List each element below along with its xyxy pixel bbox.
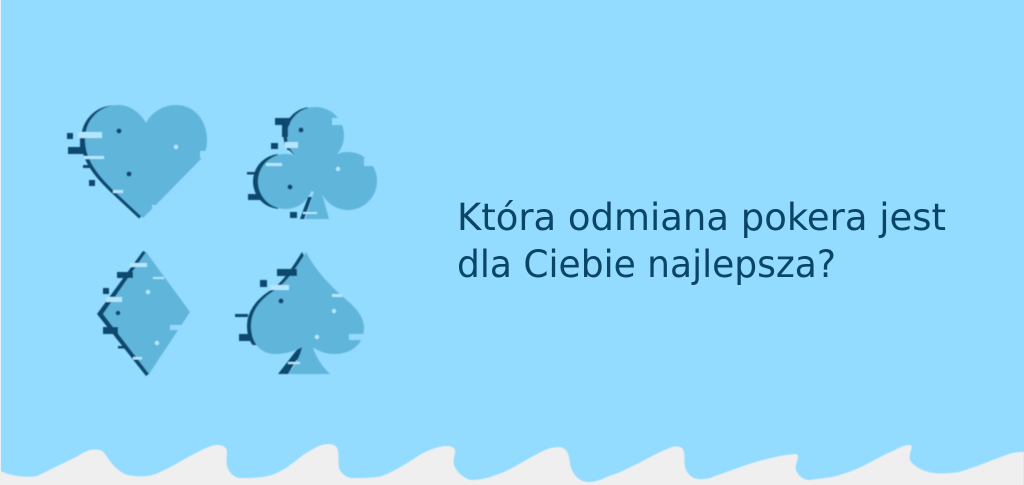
icon: spade suit: [235, 252, 365, 374]
icon: heart suit: [67, 105, 209, 218]
icon: diamond suit: [97, 251, 190, 376]
heading: Która odmiana pokera jest: [457, 196, 946, 239]
wave footer: [0, 444, 1024, 485]
heading: dla Ciebie najlepsza?: [457, 243, 836, 286]
heading: [457, 196, 946, 286]
icon: club suit: [247, 107, 377, 219]
